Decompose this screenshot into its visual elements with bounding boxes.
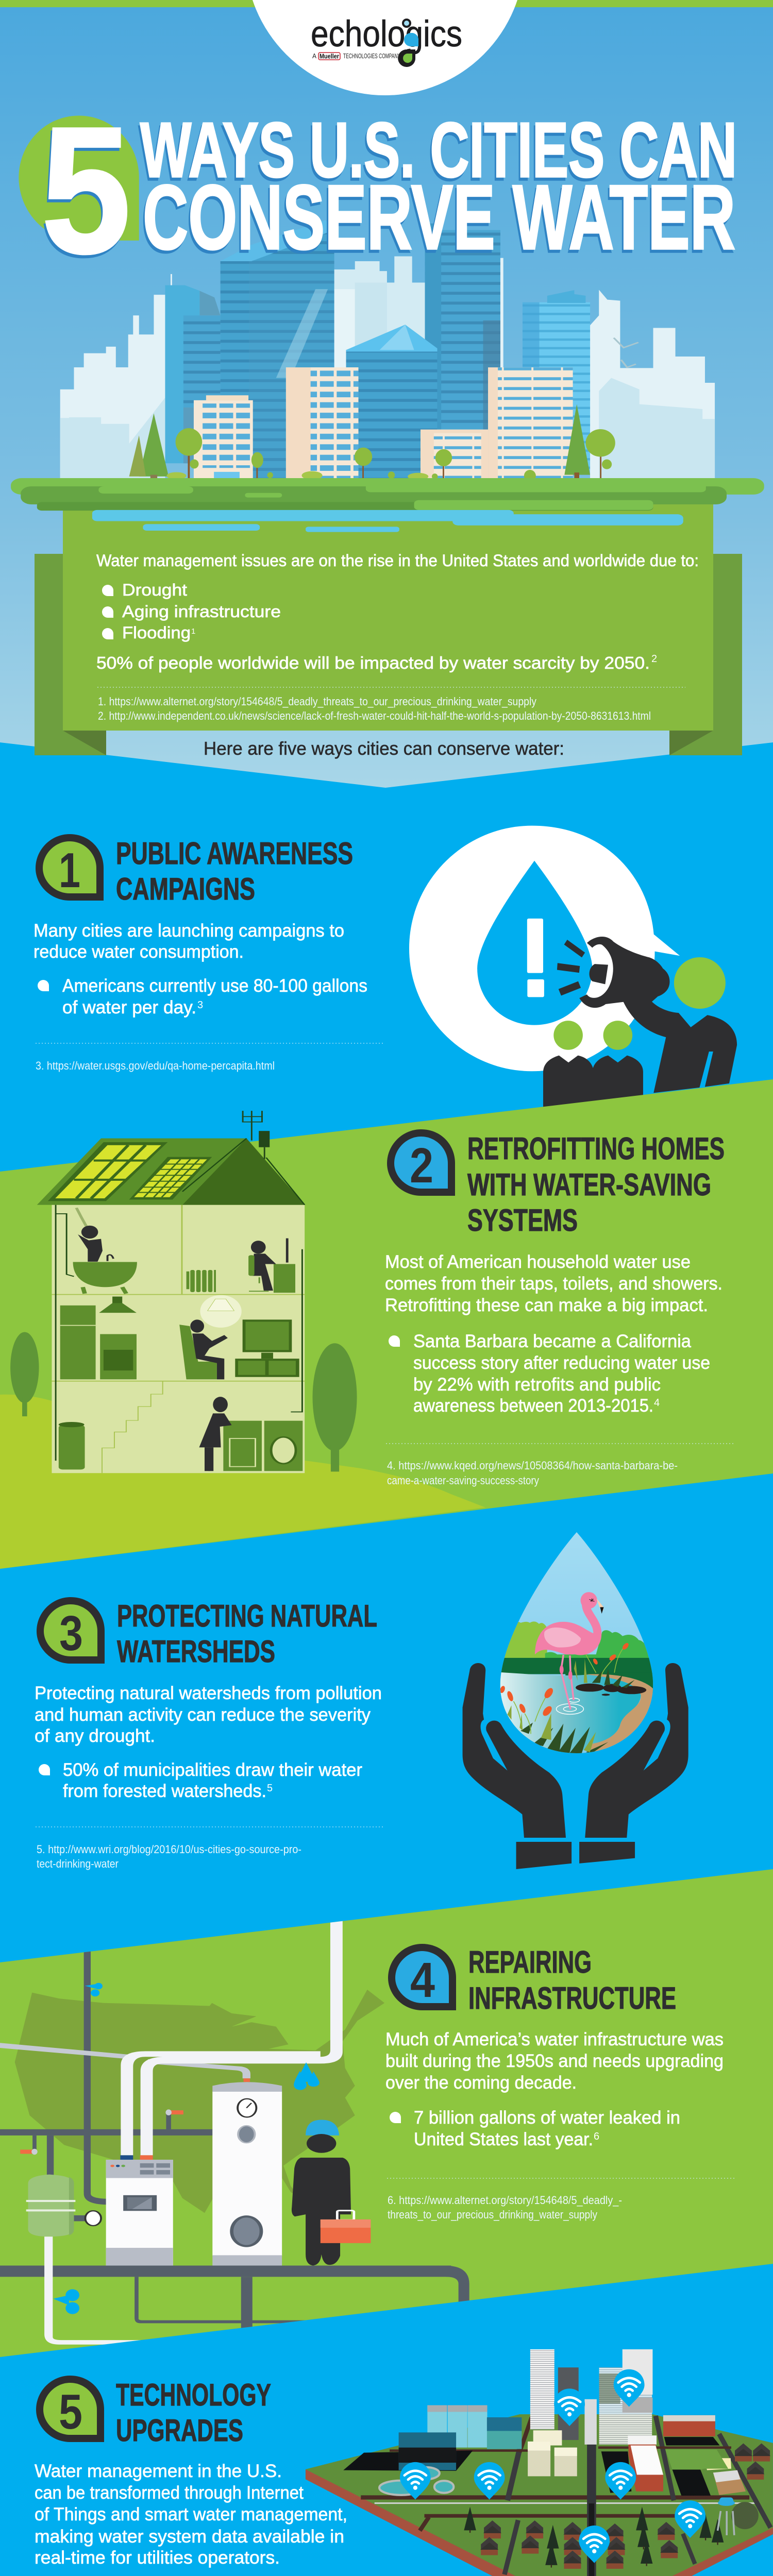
header logo badge — [245, 0, 525, 95]
study — [187, 1239, 295, 1293]
heading 1 — [116, 836, 353, 906]
heading 2 — [467, 1131, 725, 1238]
section 4 green band — [0, 1869, 773, 2357]
intro references: 1. https://www.alternet.org/story/154648/5_deadly_threats_to_our_precious_drinking_water_supply — [98, 695, 536, 708]
scarcity statistic: 2 — [651, 653, 657, 665]
reeds — [520, 1669, 635, 1753]
football field — [665, 2450, 728, 2470]
map of USA — [15, 1990, 384, 2213]
bullet 3 — [39, 1760, 362, 1801]
body 5: can be transformed through Internet — [35, 2483, 304, 2503]
solar panel large — [48, 1142, 167, 1201]
background: sky with chevron — [0, 0, 773, 788]
bullet 3: 5 — [267, 1783, 273, 1794]
logo: echologics: TECHNOLOGIES COMPANY — [343, 52, 400, 60]
logo: echologics — [311, 14, 462, 67]
parking lots — [601, 2437, 720, 2496]
logo: echologics: echologics — [311, 14, 462, 55]
heading 5: TECHNOLOGY — [116, 2378, 271, 2412]
wifi pins — [400, 2369, 705, 2563]
bullet 4: 7 billion gallons of water leaked in — [414, 2108, 680, 2128]
illustration: house — [10, 1111, 357, 1473]
intro lead text: Water management issues are on the rise in the United States and worldwide due to: — [96, 551, 699, 570]
body 4 — [385, 2029, 724, 2093]
wiring — [56, 1139, 305, 1461]
water tower — [718, 2497, 735, 2535]
heading 1: PUBLIC AWARENESS — [116, 836, 353, 871]
cattails — [513, 1646, 625, 1734]
reference 5 — [37, 1843, 301, 1870]
intro ribbon folds — [35, 554, 742, 755]
pine trees — [464, 2502, 759, 2568]
section 5: technology — [35, 2376, 384, 2576]
illustration: megaphone and water drop — [409, 826, 737, 1113]
blue main tower — [221, 220, 334, 478]
roads — [361, 2402, 770, 2576]
badge 2: 2 — [410, 1138, 433, 1193]
section 2 green band — [0, 1079, 773, 1569]
white supply pipes — [121, 1920, 343, 2155]
intro references — [98, 695, 651, 722]
bullet 1: of water per day. — [62, 997, 196, 1018]
body 5 — [35, 2461, 347, 2568]
drop scene — [498, 1530, 655, 1756]
blue tower right — [523, 290, 590, 470]
house walls — [52, 1205, 305, 1473]
blue front tower — [346, 325, 438, 478]
bullet 2: success story after reducing water use — [413, 1353, 710, 1373]
body 3 — [35, 1683, 382, 1746]
water drop — [477, 861, 592, 1025]
bullet 3: 50% of municipalities draw their water — [63, 1760, 362, 1780]
birds — [614, 338, 638, 367]
issues list: 1 — [191, 627, 195, 636]
lime hills — [0, 1395, 485, 1569]
gauge — [85, 2211, 101, 2226]
bullet 4: United States last year. — [414, 2129, 593, 2149]
heading 4: REPAIRING — [468, 1945, 592, 1979]
section 1: public awareness — [33, 834, 383, 1072]
illustration: infrastructure — [0, 1920, 469, 2345]
section 3: watersheds — [35, 1597, 384, 1870]
bullet 4 — [390, 2108, 680, 2149]
water drips — [53, 1983, 320, 2314]
intro references: 2. http://www.independent.co.uk/news/science/lack-of-fresh-water-could-hit-half-the-world-s-population-by-2050-8631613.html — [98, 709, 651, 722]
body 5: of Things and smart water management, — [35, 2504, 347, 2524]
logo: echologics: Mueller — [320, 53, 339, 60]
body 2: Most of American household water use — [385, 1252, 691, 1272]
body 5: making water system data available in — [35, 2527, 344, 2547]
flamingo — [535, 1592, 604, 1709]
body 1: Many cities are launching campaigns to — [33, 921, 344, 941]
cream building one — [194, 395, 253, 478]
illustration: hands holding drop with flamingo — [463, 1530, 688, 1869]
reference 4: came-a-water-saving-success-story — [387, 1474, 539, 1487]
scarcity statistic: 50% of people worldwide will be impacted by water scarcity by 2050. — [96, 653, 650, 672]
body 4: built during the 1950s and needs upgrading — [385, 2051, 724, 2071]
bullet 1: 3 — [197, 999, 203, 1011]
ground slab — [306, 2414, 773, 2576]
crowd — [543, 1056, 643, 1113]
body 4: Much of America’s water infrastructure was — [385, 2029, 724, 2049]
top green bar — [0, 0, 773, 7]
heading 3: PROTECTING NATURAL — [117, 1599, 377, 1633]
stairs — [102, 1381, 175, 1473]
blue tower left — [165, 274, 221, 463]
issues list: Flooding — [122, 623, 191, 642]
title: 5 ways — [19, 90, 737, 291]
person with megaphone — [579, 937, 737, 1093]
cream apartments — [528, 2430, 577, 2476]
downtown towers — [530, 2349, 652, 2445]
cream building four — [421, 430, 488, 478]
reference 6: threats_to_our_precious_drinking_water_supply — [388, 2208, 597, 2221]
body 5: Water management in the U.S. — [35, 2461, 282, 2481]
heading 4: INFRASTRUCTURE — [468, 1981, 676, 2015]
valves — [20, 2109, 183, 2155]
bullet 1 — [38, 976, 367, 1018]
floor pipes — [0, 2265, 469, 2333]
worker — [292, 2120, 371, 2265]
body 3: of any drought. — [35, 1726, 155, 1746]
heading 2: SYSTEMS — [467, 1203, 578, 1238]
speech bubble — [409, 826, 680, 1071]
cuffs — [516, 1842, 635, 1869]
antenna — [242, 1111, 270, 1159]
issues list: Drought — [122, 581, 187, 599]
badge 5 — [36, 2376, 104, 2442]
exclamation — [527, 919, 544, 997]
right hand — [585, 1663, 688, 1838]
kitchen — [60, 1297, 137, 1379]
heads — [553, 957, 726, 1050]
reference 6: 6. https://www.alternet.org/story/154648/5_deadly_- — [388, 2194, 622, 2207]
red buildings — [628, 2415, 746, 2495]
body 2 — [385, 1252, 722, 1315]
badge 1 — [36, 834, 104, 901]
boiler — [106, 2160, 173, 2265]
solar panel small — [129, 1157, 212, 1199]
bullet 2: Santa Barbara became a California — [413, 1331, 692, 1351]
water tank — [59, 1422, 85, 1469]
bullet 1: Americans currently use 80-100 gallons — [62, 976, 367, 996]
heading 4 — [468, 1945, 676, 2015]
white return pipe — [44, 2236, 141, 2345]
grass island — [11, 478, 764, 532]
title: 5 ways: 5 — [41, 90, 131, 291]
floors — [52, 1205, 305, 1381]
bathroom — [73, 1208, 137, 1294]
bullet 3: from forested watersheds. — [63, 1781, 266, 1801]
badge 3: 3 — [59, 1606, 83, 1661]
reference 5: tect-drinking-water — [37, 1857, 119, 1870]
bullet 2: by 22% with retrofits and public — [413, 1375, 661, 1395]
body 3: Protecting natural watersheds from pollution — [35, 1683, 382, 1703]
heading 3: WATERSHEDS — [117, 1634, 275, 1669]
ripples — [556, 1698, 583, 1714]
reference 3: 3. https://water.usgs.gov/edu/qa-home-percapita.html — [36, 1059, 275, 1072]
bullet 2: 4 — [654, 1397, 660, 1409]
pale centre buildings — [334, 256, 425, 368]
reference 6 — [388, 2194, 622, 2221]
intro panel — [63, 492, 713, 731]
transition line: Here are five ways cities can conserve water: — [204, 738, 564, 759]
body 2: Retrofitting these can make a big impact. — [385, 1295, 708, 1315]
pale background buildings right — [590, 290, 715, 478]
heading 1: CAMPAIGNS — [116, 872, 255, 906]
section 4: repairing — [385, 1944, 735, 2221]
reference 4 — [387, 1459, 678, 1487]
neighbourhood houses — [480, 2443, 770, 2569]
badge 4: 4 — [410, 1953, 435, 2008]
reference 5: 5. http://www.wri.org/blog/2016/10/us-cities-go-source-pro- — [37, 1843, 301, 1856]
grey pipes — [0, 1929, 212, 2221]
badge 5: 5 — [59, 2384, 82, 2439]
expansion tank — [26, 2175, 75, 2236]
sound rays — [557, 940, 585, 996]
logo: echologics: A — [312, 52, 316, 60]
badge 2 — [387, 1129, 455, 1196]
badge 4 — [388, 1944, 456, 2010]
body 4: over the coming decade. — [385, 2073, 577, 2093]
rocks — [576, 1684, 646, 1696]
light feed pipe — [0, 2043, 250, 2078]
badge 3 — [37, 1597, 105, 1664]
pale background buildings left — [60, 295, 165, 478]
heading 5 — [116, 2378, 271, 2448]
living room — [179, 1319, 299, 1379]
reference 4: 4. https://www.kqed.org/news/10508364/how-santa-barbara-be- — [387, 1459, 678, 1472]
section 2: retrofitting — [385, 1129, 734, 1487]
laundry — [199, 1397, 303, 1471]
illustration: smart city — [306, 2349, 773, 2576]
body 3: and human activity can reduce the severity — [35, 1705, 371, 1725]
body 1: reduce water consumption. — [33, 942, 244, 962]
water treatment buildings — [343, 2405, 522, 2495]
blue tower centre right — [425, 224, 503, 480]
badge 1: 1 — [59, 843, 80, 898]
issues list: Aging infrastructure — [122, 602, 281, 621]
cream building three — [488, 367, 573, 478]
bullet 4: 6 — [594, 2131, 599, 2142]
body 1 — [33, 921, 344, 962]
body 5: real-time for utilities operators. — [35, 2548, 280, 2568]
cream building two — [286, 367, 358, 478]
heading 3 — [117, 1599, 377, 1669]
issues list — [102, 581, 281, 642]
trees — [129, 404, 615, 482]
city skyline illustration — [60, 220, 715, 482]
left hand — [463, 1663, 566, 1838]
heading 5: UPGRADES — [116, 2413, 243, 2448]
lamp — [200, 1295, 242, 1328]
bullet 2 — [389, 1331, 710, 1416]
water heater — [212, 2082, 282, 2265]
roof — [37, 1139, 246, 1205]
bullet 2: awareness between 2013-2015. — [413, 1396, 653, 1416]
body 2: comes from their taps, toilets, and showers. — [385, 1274, 722, 1294]
trees — [10, 1332, 357, 1471]
